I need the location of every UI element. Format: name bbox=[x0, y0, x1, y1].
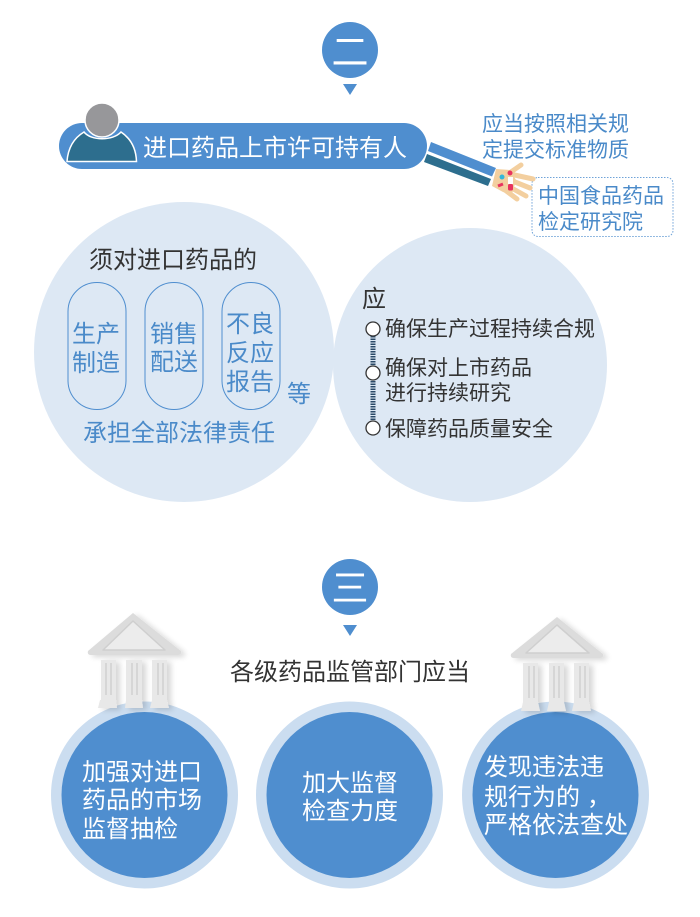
obligation list: 进行持续研究 bbox=[385, 382, 511, 405]
pill: adverse reaction reporting bbox=[222, 282, 280, 410]
pill: production: 制造 bbox=[72, 350, 120, 377]
text: bear responsibility: 承担全部法律责任 bbox=[83, 420, 275, 447]
circle: supervision: 检查力度 bbox=[302, 798, 398, 825]
panel: obligations bbox=[333, 228, 607, 502]
heading: 应 bbox=[362, 286, 386, 313]
circle: market inspection: 加强对进口 bbox=[82, 759, 202, 786]
text: submit reference standards bbox=[482, 113, 629, 162]
pill: production bbox=[68, 282, 126, 410]
pill: adverse reaction reporting: 不良 bbox=[226, 311, 274, 338]
text: etc: 等 bbox=[287, 381, 311, 408]
pill: adverse reaction reporting: 反应 bbox=[226, 340, 274, 367]
section heading: 各级药品监管部门应当 bbox=[230, 659, 470, 686]
icon: person bbox=[67, 103, 136, 162]
pill: adverse reaction reporting: 报告 bbox=[226, 369, 274, 396]
circle: market inspection bbox=[51, 702, 238, 888]
obligation list bbox=[385, 318, 595, 441]
text: submit reference standards: 定提交标准物质 bbox=[482, 139, 629, 162]
pill: production: 生产 bbox=[72, 321, 120, 348]
icon: hand holding pills bbox=[492, 165, 533, 199]
icon: arm sleeve bbox=[424, 142, 496, 186]
obligation list: 保障药品质量安全 bbox=[385, 418, 553, 441]
banner title: 进口药品上市许可持有人 bbox=[143, 135, 407, 162]
icon: left government building bbox=[88, 613, 181, 708]
callout: institute: 检定研究院 bbox=[538, 211, 643, 234]
circle: market inspection: 药品的市场 bbox=[82, 787, 202, 814]
icon: right government building bbox=[511, 617, 603, 711]
heading: 须对进口药品的 bbox=[89, 247, 257, 274]
panel: legal responsibility bbox=[34, 202, 334, 502]
circle: punishment: 规行为的 ， bbox=[484, 784, 611, 811]
circle: punishment: 严格依法查处 bbox=[484, 812, 628, 839]
circle: punishment: 发现违法违 bbox=[484, 754, 604, 781]
pill: distribution: 销售 bbox=[150, 321, 198, 348]
holder banner bbox=[59, 103, 427, 169]
pill: distribution: 配送 bbox=[150, 349, 198, 376]
text: submit reference standards: 应当按照相关规 bbox=[482, 113, 629, 136]
circle: market inspection: 监督抽检 bbox=[82, 816, 178, 843]
circle: supervision: 加大监督 bbox=[302, 770, 398, 797]
callout: institute bbox=[532, 178, 673, 236]
timeline bbox=[366, 322, 380, 435]
obligation list: 确保生产过程持续合规 bbox=[385, 318, 595, 341]
circle: supervision bbox=[256, 702, 443, 888]
callout: institute: 中国食品药品 bbox=[538, 185, 664, 208]
circle: punishment bbox=[462, 702, 649, 888]
pill: distribution bbox=[145, 282, 203, 410]
section badge: three bbox=[322, 559, 378, 636]
obligation list: 确保对上市药品 bbox=[385, 357, 532, 380]
section badge: three: 三 bbox=[332, 568, 368, 609]
section badge: two: 二 bbox=[332, 32, 368, 73]
section badge: two bbox=[322, 22, 378, 95]
